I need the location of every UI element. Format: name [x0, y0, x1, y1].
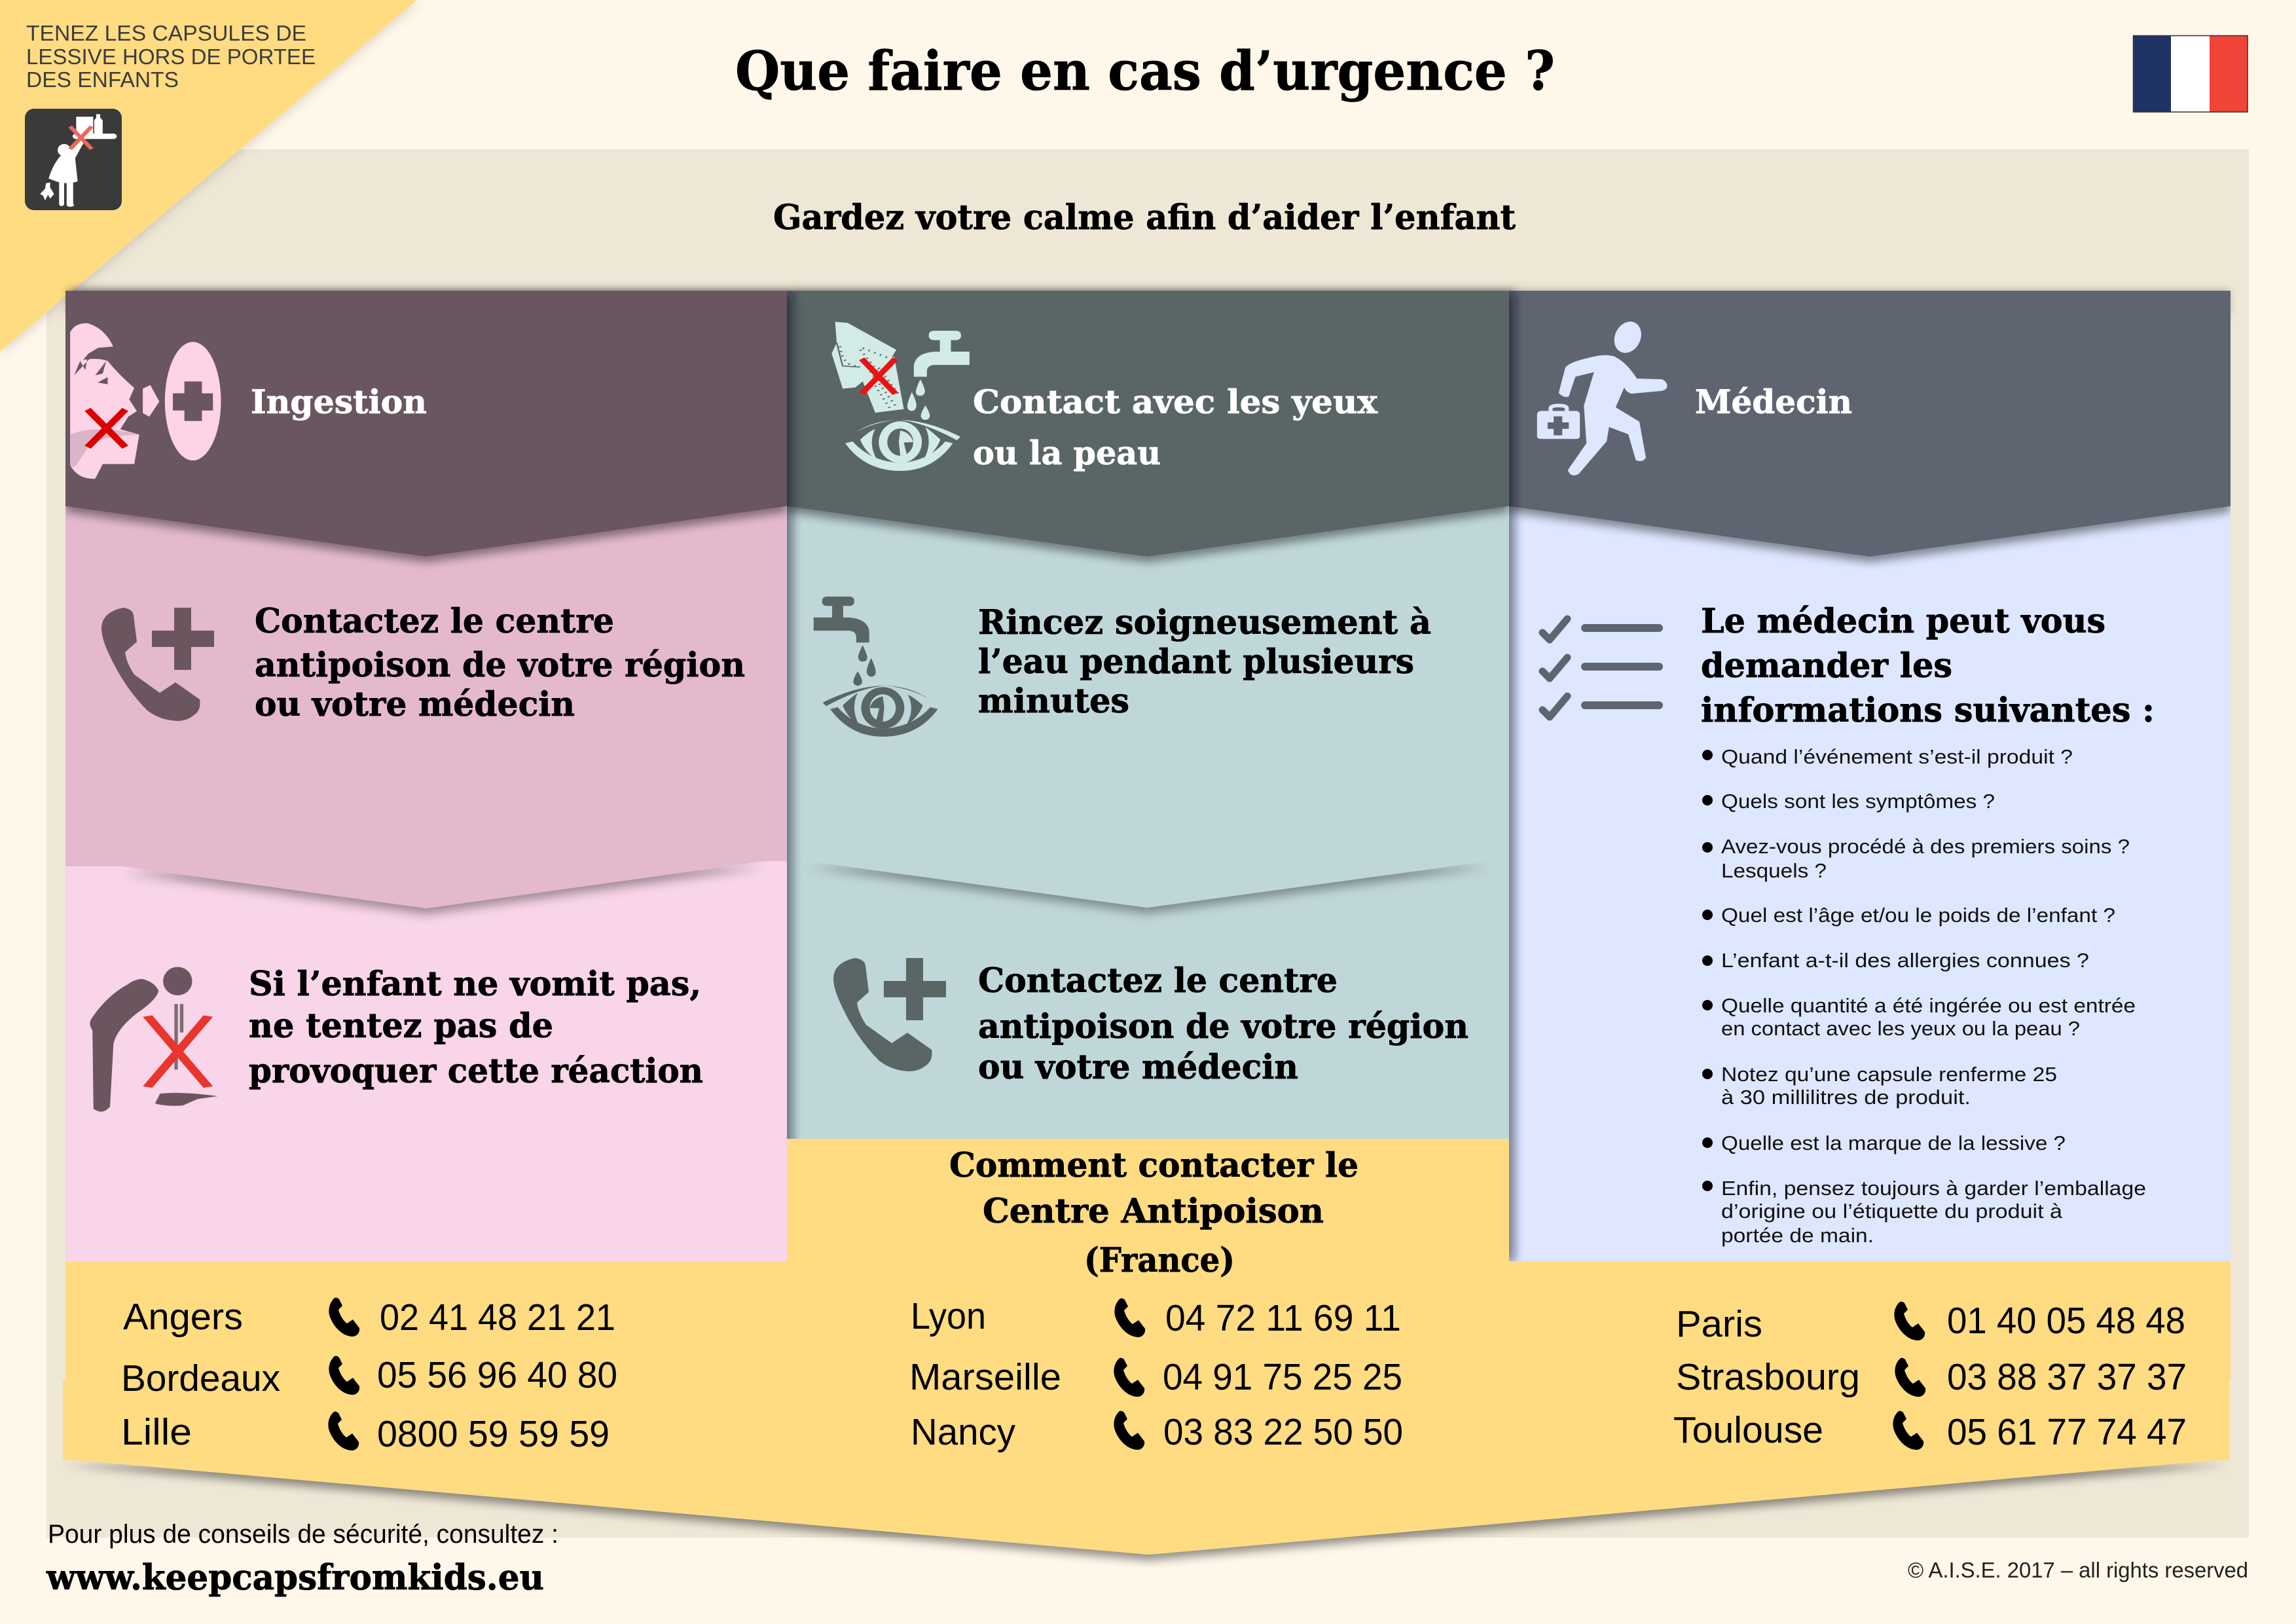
text: rinse with water: Rincez soigneusement à — [978, 603, 1431, 642]
text: do not induce vomiting: ne tentez pas de — [249, 1006, 553, 1046]
contacts: Paris, Strasbourg, Toulouse — [1673, 1300, 2187, 1453]
banner text: keep capsules away from children: DES ENFANTS — [26, 67, 179, 92]
list: questions from the doctor: Quelle est la marque de la lessive ? — [1721, 1132, 2066, 1154]
list: questions from the doctor: à 30 millilitres de produit. — [1721, 1086, 1971, 1109]
list: questions from the doctor: L’enfant a-t-il des allergies connues ? — [1721, 949, 2089, 972]
soft shadow above columns — [65, 291, 2231, 317]
icon: capsule, tap and eye — [831, 322, 970, 471]
footer: copyright: © A.I.S.E. 2017 – all rights reserved — [1908, 1558, 2248, 1582]
list: questions from the doctor: Enfin, pensez toujours à garder l’emballage — [1721, 1177, 2146, 1200]
list: questions from the doctor: Quel est l’âge et/ou le poids de l’enfant ? — [1721, 904, 2115, 927]
text: contact poison centre, eyes: ou votre médecin — [978, 1048, 1298, 1087]
text: doctor may ask: informations suivantes : — [1701, 691, 2155, 730]
title: Que faire en cas d’urgence ? — [735, 40, 1555, 103]
heading: how to contact the poison centre: Comment contacter le — [949, 1146, 1358, 1185]
text: do not induce vomiting — [249, 965, 703, 1091]
heading: how to contact the poison centre: (France) — [1084, 1241, 1235, 1280]
list: questions from the doctor: en contact avec les yeux ou la peau ? — [1721, 1017, 2080, 1040]
list: questions from the doctor: portée de main. — [1721, 1224, 1874, 1247]
text: do not induce vomiting: provoquer cette réaction — [249, 1052, 703, 1091]
contacts: Paris, Strasbourg, Toulouse: 03 88 37 37 37 — [1947, 1356, 2187, 1398]
contacts: Angers, Bordeaux, Lille: Bordeaux — [121, 1357, 280, 1399]
header: Médecin chevron — [1509, 291, 2231, 557]
text: contact poison centre, eyes: Contactez le centre — [978, 961, 1338, 1001]
heading: how to contact the poison centre: Centre Antipoison — [983, 1192, 1324, 1231]
yellow chevron bottom with shadow — [63, 1459, 2229, 1555]
list: questions from the doctor: d’origine ou l’étiquette du produit à — [1721, 1200, 2063, 1223]
list: questions from the doctor: Notez qu’une capsule renferme 25 — [1721, 1063, 2057, 1086]
text: doctor may ask: demander les — [1701, 646, 1952, 686]
text: doctor may ask — [1701, 602, 2155, 730]
panel: yellow phone band — [63, 1261, 2231, 1460]
footer: safety advice: Pour plus de conseils de sécurité, consultez : — [48, 1520, 558, 1549]
contacts: Paris, Strasbourg, Toulouse: Strasbourg — [1676, 1356, 1860, 1398]
icon: checklist — [1542, 619, 1659, 717]
text: do not induce vomiting: Si l’enfant ne vomit pas, — [249, 965, 701, 1004]
list: questions from the doctor: Quels sont les symptômes ? — [1721, 790, 1995, 813]
contacts: Lyon, Marseille, Nancy: 03 83 22 50 50 — [1163, 1411, 1403, 1453]
panel: Médecin column — [1509, 291, 2231, 1261]
text: contact poison centre, eyes — [978, 961, 1468, 1087]
contacts: Paris, Strasbourg, Toulouse: 01 40 05 48 48 — [1947, 1300, 2185, 1342]
chevron shadow: rinse step — [808, 861, 1489, 908]
heading: how to contact the poison centre — [949, 1146, 1358, 1280]
panel: ingestion column — [65, 291, 787, 1264]
list: questions from the doctor: Avez-vous procédé à des premiers soins ? — [1721, 835, 2130, 858]
contacts: Lyon, Marseille, Nancy — [909, 1295, 1403, 1453]
chevron shadow: contact step — [122, 861, 764, 908]
icon: child reaching for a shelf — [25, 109, 122, 210]
text: contact poison centre, ingestion: Contactez le centre — [255, 602, 614, 641]
contacts: Angers, Bordeaux, Lille: 05 56 96 40 80 — [377, 1354, 617, 1396]
heading: Contact avec les yeux ou la peau: Contact avec les yeux — [973, 382, 1378, 421]
icon: phone with plus, eyes — [833, 958, 946, 1071]
contacts: Lyon, Marseille, Nancy: 04 91 75 25 25 — [1163, 1356, 1402, 1398]
icon: doctor running with medical bag — [1537, 320, 1667, 475]
heading: Contact avec les yeux ou la peau: ou la peau — [973, 434, 1161, 472]
text: rinse with water: l’eau pendant plusieurs — [978, 642, 1414, 682]
contacts: Angers, Bordeaux, Lille: Angers — [123, 1296, 243, 1338]
contacts: Paris, Strasbourg, Toulouse: 05 61 77 74 47 — [1947, 1411, 2187, 1453]
contacts: Paris, Strasbourg, Toulouse: Toulouse — [1673, 1409, 1823, 1451]
list: questions from the doctor — [1702, 745, 2146, 1247]
contacts: Lyon, Marseille, Nancy: Lyon — [911, 1295, 986, 1337]
heading: Contact avec les yeux ou la peau — [973, 382, 1378, 472]
banner text: keep capsules away from children: TENEZ LES CAPSULES DE — [26, 21, 306, 45]
icon: phone with plus, ingestion — [101, 608, 214, 721]
text: contact poison centre, ingestion — [255, 602, 745, 724]
text: contact poison centre, eyes: antipoison de votre région — [978, 1007, 1468, 1046]
subtitle: Gardez votre calme afin d’aider l’enfant — [773, 198, 1516, 238]
panel: contact with eyes or skin column — [787, 291, 1509, 1261]
contacts: Angers, Bordeaux, Lille: 02 41 48 21 21 — [380, 1297, 615, 1338]
contacts: Paris, Strasbourg, Toulouse: Paris — [1676, 1303, 1762, 1345]
icon: face with mouth crossed and medical oval — [70, 323, 221, 479]
text: rinse with water: minutes — [978, 682, 1129, 721]
contacts: Angers, Bordeaux, Lille — [121, 1296, 617, 1455]
footer: website: www.keepcapsfromkids.eu — [46, 1557, 544, 1598]
contacts: Angers, Bordeaux, Lille: Lille — [121, 1411, 192, 1453]
text: doctor may ask: Le médecin peut vous — [1701, 602, 2105, 641]
contacts: Angers, Bordeaux, Lille: 0800 59 59 59 — [377, 1413, 610, 1455]
banner text: keep capsules away from children — [26, 21, 316, 92]
contacts: Lyon, Marseille, Nancy: Nancy — [911, 1411, 1015, 1453]
heading: Ingestion: Ingestion — [251, 382, 427, 421]
contacts: Lyon, Marseille, Nancy: Marseille — [909, 1356, 1061, 1398]
text: rinse with water — [978, 603, 1431, 721]
flag: France — [2133, 35, 2248, 112]
list: questions from the doctor: Quand l’événement s’est-il produit ? — [1721, 745, 2073, 768]
text: contact poison centre, ingestion: ou votre médecin — [255, 685, 575, 724]
contacts: Lyon, Marseille, Nancy: 04 72 11 69 11 — [1165, 1297, 1401, 1339]
corner banner: yellow triangle — [0, 0, 417, 352]
list: questions from the doctor: Quelle quantité a été ingérée ou est entrée — [1721, 994, 2136, 1017]
heading: Médecin: Médecin — [1695, 382, 1852, 421]
icon: person bending with crossed out vomit — [90, 967, 218, 1112]
banner text: keep capsules away from children: LESSIVE HORS DE PORTEE — [26, 45, 316, 69]
panel: yellow heading block — [787, 1139, 1509, 1266]
text: contact poison centre, ingestion: antipoison de votre région — [255, 646, 745, 685]
list: questions from the doctor: Lesquels ? — [1721, 859, 1827, 882]
icon: tap rinsing eye — [814, 597, 938, 737]
